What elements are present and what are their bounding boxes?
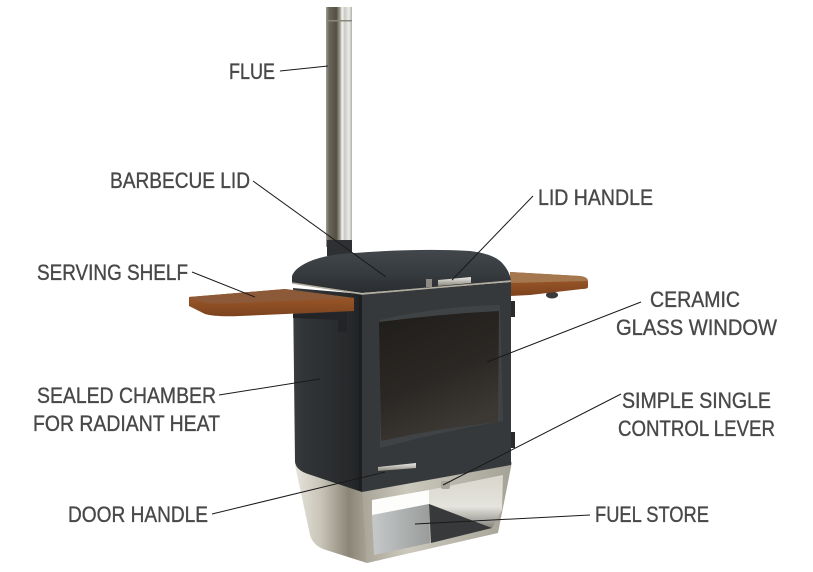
label: control lever [618,388,775,441]
door panel frame [380,305,503,448]
label: sealed chamber: FOR RADIANT HEAT [33,411,220,436]
stove body [293,282,515,492]
leader lines [192,66,641,524]
label: flue: FLUE [229,59,275,84]
label: ceramic glass window: GLASS WINDOW [616,315,777,340]
label: serving shelf: SERVING SHELF [37,260,188,285]
door handle [378,463,416,471]
right serving shelf [510,272,588,298]
flue pipe [326,7,352,256]
ceramic glass window [379,311,499,441]
label: sealed chamber: SEALED CHAMBER [37,383,216,408]
label: barbecue lid: BARBECUE LID [110,168,250,193]
label: control lever: SIMPLE SINGLE [622,388,771,413]
label: ceramic glass window: CERAMIC [650,287,740,312]
label: door handle: DOOR HANDLE [68,502,208,527]
control lever [441,481,450,489]
label: fuel store: FUEL STORE [595,502,709,527]
label: ceramic glass window [616,287,777,340]
label: lid handle: LID HANDLE [538,185,653,210]
label: control lever: CONTROL LEVER [618,416,775,441]
barbecue lid [292,250,511,294]
label: sealed chamber [33,383,220,436]
lid handle [426,277,471,287]
stainless steel base [295,462,512,563]
fuel store opening [372,475,503,555]
left serving shelf [189,289,354,332]
